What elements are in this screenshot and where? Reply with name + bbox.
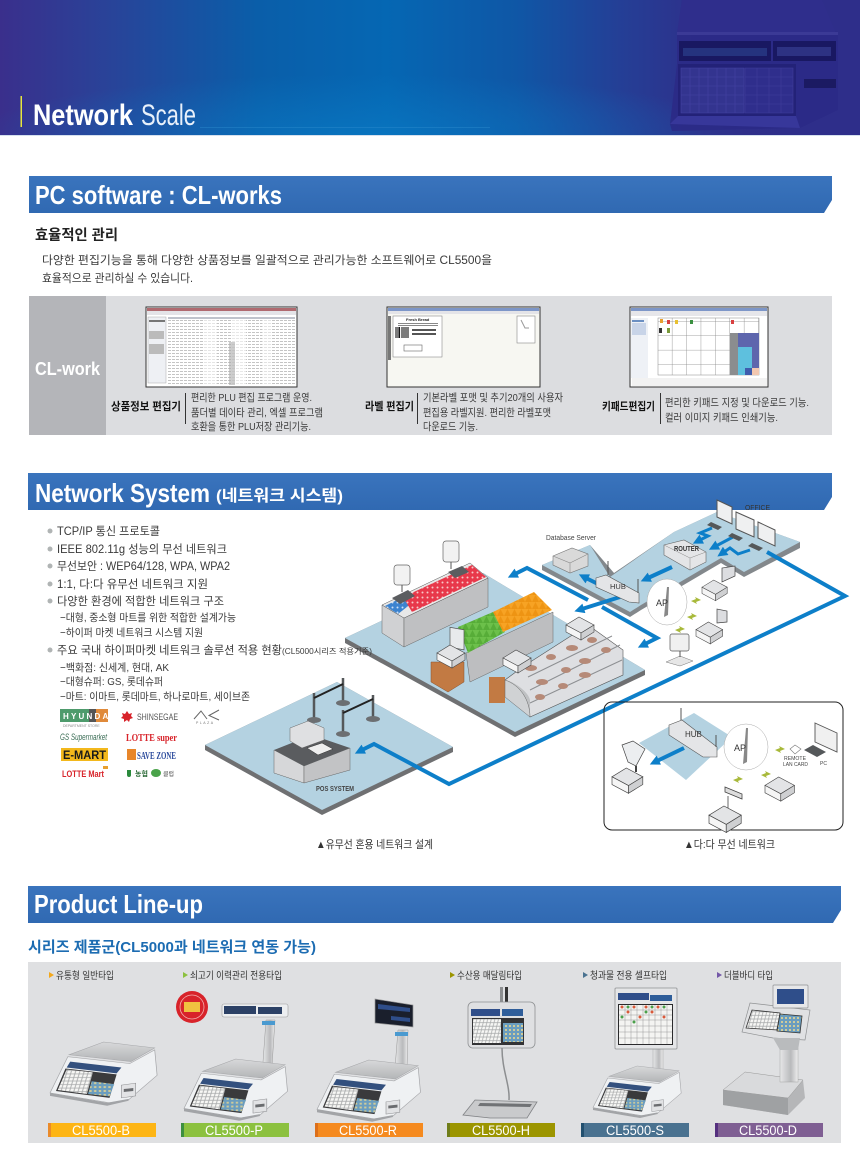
floor: server and office xyxy=(542,512,800,617)
hub: HUB xyxy=(685,730,702,739)
text block: network features: −하이퍼 마켓 네트워크 시스템 지원 xyxy=(60,626,203,639)
hub xyxy=(669,708,717,757)
logo: Save Zone: SAVE ZONE xyxy=(137,751,176,762)
product: CL5500-D: CL5500-D xyxy=(739,1123,797,1138)
text block: intro: 효율적으로 관리하실 수 있습니다. xyxy=(42,271,193,285)
product: CL5500-R xyxy=(315,999,423,1138)
panel: CL-work xyxy=(29,296,832,435)
counter: produce display xyxy=(382,541,488,647)
logo: Shinsegae xyxy=(121,711,178,722)
text block: keypad editor: 키패드편집기 xyxy=(602,399,655,413)
counter: fruit and vegetables xyxy=(431,592,553,692)
text block: intro xyxy=(42,253,492,285)
office xyxy=(707,500,775,551)
remote LAN card and PC: REMOTE xyxy=(784,756,807,762)
POS station xyxy=(274,678,380,793)
icon: certification stamp xyxy=(176,991,208,1023)
text block: keypad editor xyxy=(602,393,809,424)
panel: Network System heading xyxy=(28,473,832,510)
captions: ▲유무선 혼용 네트워크 설계 xyxy=(316,838,433,851)
text block: network features: −대형슈퍼: GS, 롯데슈퍼 xyxy=(60,676,163,688)
icon: hanging scale xyxy=(463,987,537,1118)
router: ROUTER xyxy=(674,546,699,553)
panel: PC software heading xyxy=(29,176,832,213)
text block: keypad editor: 컬러 이미지 키패드 인쇄기능. xyxy=(665,411,778,424)
remote LAN card and PC: LAN CARD xyxy=(783,762,808,768)
header band xyxy=(0,0,860,136)
logo: Shinsegae: SHINSEGAE xyxy=(137,712,178,722)
access point: AP xyxy=(734,743,746,753)
logo: AK Plaza xyxy=(194,710,219,725)
network lines xyxy=(362,528,845,784)
diagram: wired and wireless network design xyxy=(205,500,845,815)
screenshot: PLU editor xyxy=(146,307,297,387)
logo: Lotte Super: LOTTE super xyxy=(126,733,177,744)
hub: HUB xyxy=(610,582,626,591)
logo: Hyundai: DEPARTMENT STORE xyxy=(63,724,100,728)
product: CL5500-H: 수산용 매달림타입 xyxy=(457,969,522,982)
logo: GS Supermarket: GS Supermarket xyxy=(60,732,107,742)
wireless devices xyxy=(612,741,794,832)
access point xyxy=(724,724,768,770)
product: CL5500-B: 유통형 일반타입 xyxy=(56,969,114,982)
icon: self-service scale xyxy=(593,988,681,1118)
floor xyxy=(639,713,732,780)
arrow xyxy=(657,748,684,761)
title: Network xyxy=(33,99,133,132)
access point: AP xyxy=(656,598,668,608)
screenshot: keypad editor xyxy=(630,307,768,387)
screenshot: label editor xyxy=(387,307,540,387)
product: CL5500-S: CL5500-S xyxy=(606,1123,664,1138)
text block: network features: 무선보안 : WEP64/128, WPA, WPA2 xyxy=(57,560,230,573)
logo: Nonghyup: 클럽 xyxy=(163,770,174,778)
icon: double body scale xyxy=(723,985,810,1115)
header band: Scale xyxy=(141,99,196,132)
panel: Network System heading: Network System xyxy=(35,478,210,508)
product: CL5500-B xyxy=(48,969,157,1138)
wireless scales xyxy=(666,566,735,666)
captions xyxy=(316,838,775,851)
text block: product editor: 상품정보 편집기 xyxy=(111,399,181,413)
logos: retail partners xyxy=(60,709,219,779)
product: CL5500-H xyxy=(447,969,555,1138)
remote LAN card and PC xyxy=(783,723,837,768)
counter: refrigerated meat case xyxy=(489,617,623,717)
database server: Database Server xyxy=(546,533,596,542)
product: CL5500-S xyxy=(581,969,689,1138)
icon: scale with tilted display xyxy=(317,999,420,1122)
product: CL5500-P: 쇠고기 이력관리 전용타입 xyxy=(190,969,282,982)
POS station: POS SYSTEM xyxy=(316,786,354,793)
logo: Nonghyup: 농협 xyxy=(135,769,148,778)
product: CL5500-R: CL5500-R xyxy=(339,1123,397,1138)
text block: network features xyxy=(48,525,372,703)
logo: AK Plaza: PLAZA xyxy=(196,721,215,725)
product: CL5500-D: 더블바디 타입 xyxy=(724,969,773,982)
text block: product editor xyxy=(111,391,323,433)
access point xyxy=(647,579,687,625)
panel: product line-up xyxy=(28,962,841,1143)
product: CL5500-D xyxy=(715,969,823,1138)
text block: product editor: 편리한 PLU 편집 프로그램 운영. xyxy=(191,391,312,404)
hub xyxy=(596,561,639,603)
captions: ▲다:다 무선 네트워크 xyxy=(684,838,775,851)
panel: PC software heading: PC software : CL-works xyxy=(35,180,282,210)
office: OFFICE xyxy=(745,503,770,512)
floor: POS area xyxy=(205,682,453,815)
icon: scale with pole display xyxy=(184,1004,288,1121)
icon: scale xyxy=(50,1042,157,1106)
floor: main sales area xyxy=(345,573,645,737)
product: CL5500-B: CL5500-B xyxy=(72,1123,130,1138)
text block: label editor: 기본라벨 포맷 및 추기20개의 사용자 xyxy=(423,392,563,404)
logo: Save Zone xyxy=(127,749,176,762)
product: CL5500-P xyxy=(176,969,289,1138)
text block: intro: 다양한 편집기능을 통해 다양한 상품정보를 일괄적으로 관리가능한 소프트웨어로 CL5500을 xyxy=(42,253,492,267)
panel: CL-work: CL-work xyxy=(35,359,101,379)
subheading: 효율적인 관리 xyxy=(35,227,118,244)
logo: Hyundai: HYUNDAI xyxy=(63,712,115,721)
text block: product editor: 품더별 데이타 관리, 엑셀 프로그램 xyxy=(191,407,323,419)
database server xyxy=(546,533,596,573)
text block: network features: 다양한 환경에 적합한 네트워크 구조 xyxy=(57,594,224,608)
logo: Nonghyup xyxy=(127,769,174,778)
screenshot: label editor: Fresh Bread xyxy=(406,317,430,322)
text block: network features: IEEE 802.11g 성능의 무선 네트워크 xyxy=(57,543,227,556)
panel: Network System heading: (네트워크 시스템) xyxy=(216,487,343,505)
text block: label editor: 라벨 편집기 xyxy=(365,399,414,413)
icon: ghost scale in header xyxy=(670,0,838,131)
text block: network features: (CL5000시리즈 적용기준) xyxy=(282,646,372,656)
logo: Hyundai xyxy=(60,709,115,728)
text block: network features: −마트: 이마트, 롯데마트, 하나로마트, 세이브존 xyxy=(60,690,250,703)
router xyxy=(664,540,706,570)
text block: keypad editor: 편리한 키패드 지정 및 다운로드 기능. xyxy=(665,396,809,409)
subheading: series: 시리즈 제품군(CL5000과 네트워크 연동 가능) xyxy=(28,939,316,956)
text block: network features: −대형, 중소형 마트를 위한 적합한 설계가능 xyxy=(60,611,236,624)
text block: label editor: 편집용 라벨지원. 편리한 라벨포맷 xyxy=(423,406,551,419)
panel: Product Line-up heading xyxy=(28,886,841,923)
logo: Lotte Mart: LOTTE Mart xyxy=(62,769,104,779)
text block: label editor: 다운로드 기능. xyxy=(423,421,478,433)
product: CL5500-P: CL5500-P xyxy=(205,1123,263,1138)
text block: product editor: 호환을 통한 PLU저장 관리기능. xyxy=(191,421,311,433)
product: CL5500-S: 청과물 전용 셀프타입 xyxy=(590,969,667,982)
product: CL5500-H: CL5500-H xyxy=(472,1123,530,1138)
text block: network features: −백화점: 신세계, 현대, AK xyxy=(60,662,169,674)
text block: network features: 1:1, 다:다 유무선 네트워크 지원 xyxy=(57,577,208,591)
text block: network features: TCP/IP 통신 프로토콜 xyxy=(57,525,160,538)
remote LAN card and PC: PC xyxy=(820,761,827,767)
panel: Product Line-up heading: Product Line-up xyxy=(34,889,203,919)
text block: label editor xyxy=(365,392,563,433)
callout: many-to-many wireless network xyxy=(604,702,843,832)
logo: E-Mart: E-MART xyxy=(63,750,106,762)
text block: network features: 주요 국내 하이퍼마켓 네트워크 솔루션 적용 현황 xyxy=(57,643,282,657)
